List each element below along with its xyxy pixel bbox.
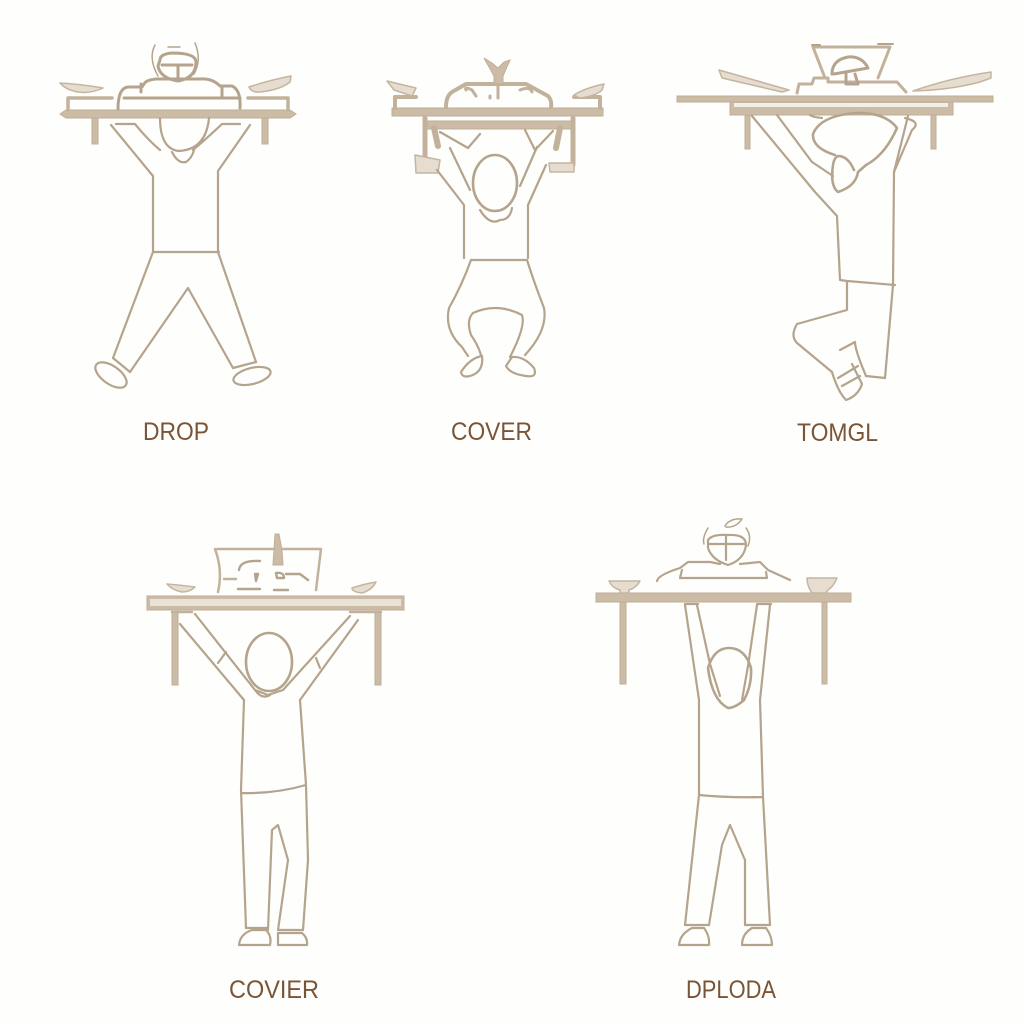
panel: figure 1 drop [60, 43, 296, 446]
table with items [147, 534, 404, 685]
table with items [677, 44, 993, 149]
label: dploda: DPLODA [686, 976, 776, 1004]
label: drop: DROP [143, 418, 209, 446]
panel: figure 4 cover [147, 534, 404, 1004]
table with items [387, 58, 604, 173]
person [437, 130, 553, 376]
person [91, 118, 272, 393]
label: cover: COVER [451, 418, 532, 446]
table with items [596, 519, 851, 684]
person [679, 604, 772, 945]
person [752, 113, 916, 400]
label: covier: COVIER [229, 976, 319, 1004]
panel: figure 3 tunnel [677, 44, 993, 447]
panel: figure 2 cover [387, 58, 604, 446]
label: tomgl: TOMGL [797, 419, 878, 447]
table with items [60, 43, 296, 144]
panel: figure 5 [596, 519, 851, 1004]
person [180, 614, 358, 945]
